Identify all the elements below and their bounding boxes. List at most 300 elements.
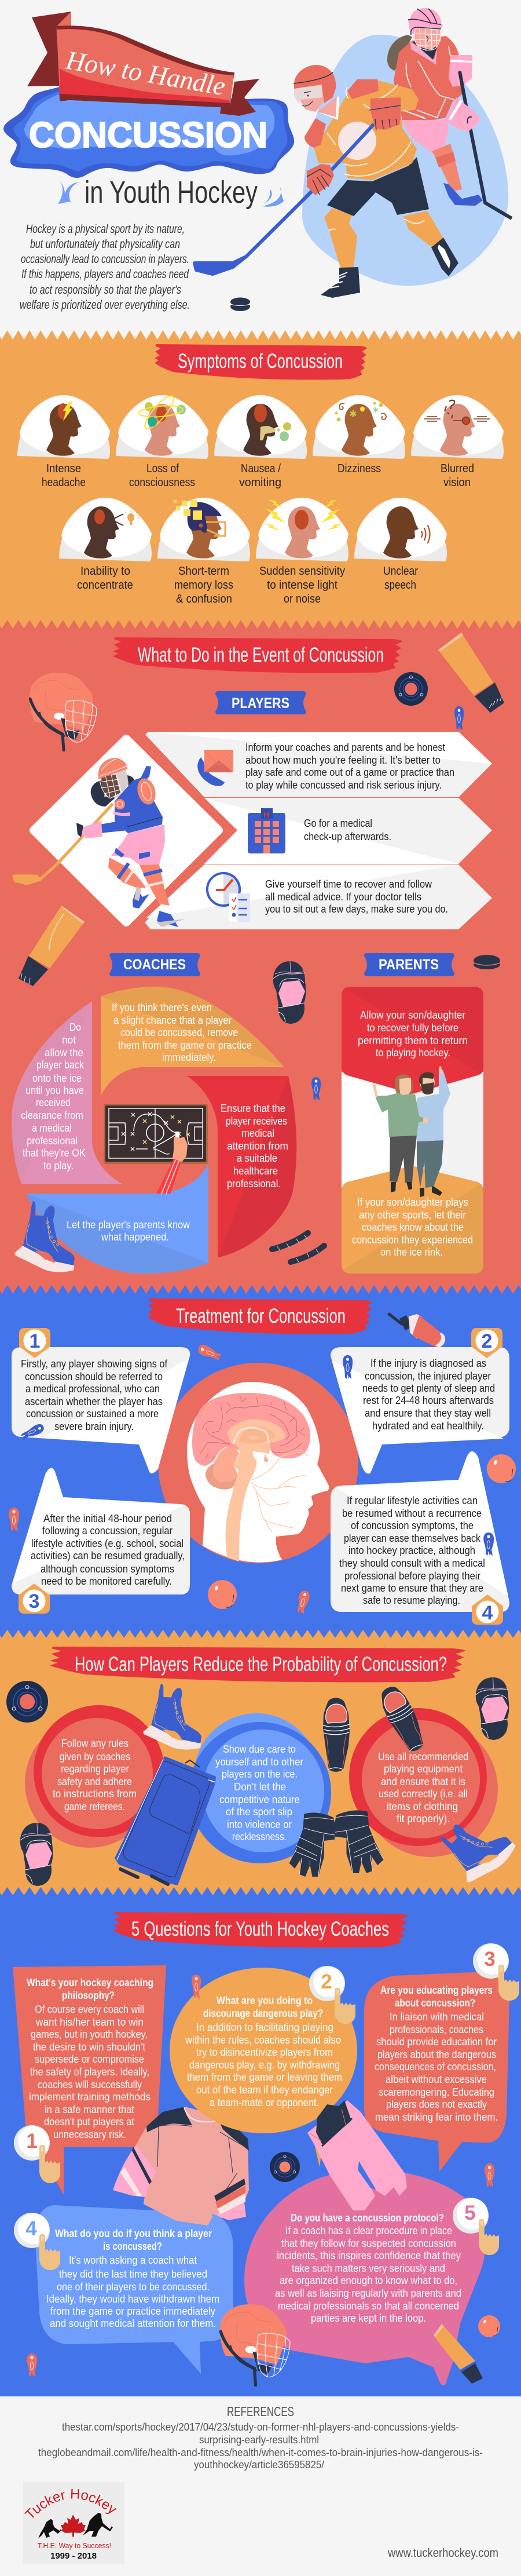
blade: clearance: allow the bbox=[45, 1046, 83, 1059]
icon: hospital bbox=[248, 808, 285, 853]
icon: phone and envelope bbox=[197, 750, 233, 786]
references: REFERENCES bbox=[227, 2404, 294, 2419]
question 3: about concussion? bbox=[395, 1997, 475, 2009]
decor: elbow pad bbox=[273, 961, 306, 1024]
question 1: philosophy? bbox=[62, 1989, 115, 2001]
question 2: What are you doing to bbox=[217, 1994, 313, 2006]
step 1: a medical professional, who can bbox=[25, 1382, 160, 1395]
label bbox=[383, 565, 418, 592]
decor: washer bbox=[394, 672, 428, 706]
step 3: need to be monitored carefully. bbox=[41, 1575, 172, 1587]
blade: remove from game: them from the game or practice bbox=[118, 1039, 252, 1051]
heading: Symptoms of Concussion bbox=[155, 344, 367, 380]
orange advice block: any other sports, let their bbox=[359, 1209, 466, 1221]
blade: medical attention: Ensure that the bbox=[221, 1102, 285, 1114]
step 3: After the initial 48-hour period bbox=[43, 1512, 172, 1524]
question 4: What do you do if you think a player bbox=[55, 2227, 212, 2239]
question 5: that they follow for suspected concussion bbox=[281, 2237, 456, 2249]
circle: equipment: fit properly). bbox=[397, 1812, 450, 1825]
advice row: medical check-up bbox=[204, 798, 492, 864]
blade: medical attention: healthcare bbox=[233, 1165, 278, 1177]
equipment: hockey bag bbox=[115, 1756, 216, 1885]
skate bbox=[14, 1201, 75, 1272]
circle: equipment: Use all recommended bbox=[378, 1750, 468, 1763]
question 4: It's worth asking a coach what bbox=[69, 2254, 197, 2266]
panel: coaches pinwheel bbox=[12, 987, 324, 1274]
symptom: blurred vision bbox=[411, 395, 504, 459]
red ribbon banner bbox=[27, 12, 259, 116]
decor: ribbons bbox=[27, 1975, 494, 2377]
circle: due care: into violence or bbox=[227, 1818, 292, 1830]
label: Intense bbox=[46, 462, 81, 475]
label: vomiting bbox=[239, 476, 281, 489]
step 3: lifestyle activities (e.g. school, social bbox=[31, 1537, 184, 1549]
equipment: gloves bbox=[289, 1811, 384, 1877]
question 3: consequences of concussion, bbox=[375, 2060, 496, 2073]
label bbox=[174, 565, 233, 605]
question 4: from the game or practice immediately bbox=[50, 2305, 216, 2317]
number 4 with pointing hand bbox=[14, 2213, 60, 2270]
blade: clearance bbox=[12, 1001, 123, 1184]
step 4: If regular lifestyle activities can bbox=[347, 1494, 478, 1506]
question 1: implement training methods bbox=[29, 2090, 151, 2103]
question 3: players about the dangerous bbox=[377, 2048, 496, 2060]
question 2: dangerous play, e.g. by withdrawing bbox=[189, 2059, 340, 2071]
symptom: unclear speech bbox=[354, 498, 447, 561]
heading tag: PLAYERS bbox=[215, 691, 306, 714]
blade: remove from game bbox=[101, 987, 284, 1097]
red advice block bbox=[342, 987, 483, 1094]
blade: tell parents: what happened. bbox=[101, 1231, 169, 1243]
question 3: mean striking fear into them. bbox=[375, 2111, 498, 2123]
heading tag: PARENTS bbox=[364, 953, 454, 976]
tactics board and hand bbox=[104, 1104, 208, 1194]
question 5 bbox=[244, 2170, 485, 2385]
circle: equipment bbox=[349, 1708, 498, 1857]
question 3: scaremongering. Educating bbox=[379, 2086, 494, 2098]
question 5: incidents, this inspires confidence that they bbox=[277, 2249, 461, 2261]
circle: due care: of the sport slip bbox=[226, 1805, 292, 1818]
nerves bbox=[251, 1450, 308, 1533]
decor: stick end bbox=[438, 633, 504, 713]
question 1: coaches will successfully bbox=[38, 2078, 142, 2090]
blade: remove from game: a slight chance that a player bbox=[113, 1014, 232, 1026]
blade: clearance: clearance from bbox=[21, 1109, 83, 1121]
question 5: parties are kept in the loop. bbox=[311, 2312, 426, 2324]
question 2 bbox=[170, 1968, 357, 2167]
label: headache bbox=[42, 476, 86, 489]
decor: ribbon bbox=[311, 1077, 321, 1100]
step 2: 2 bbox=[482, 1330, 492, 1352]
question 1: doesn't put players at bbox=[44, 2115, 134, 2128]
decor: ball bbox=[478, 2315, 500, 2337]
step 4: be resumed without a recurrence bbox=[342, 1507, 482, 1519]
front player bbox=[195, 65, 458, 298]
blade: remove from game: If you think there's even bbox=[112, 1001, 212, 1013]
symptom: intense headache bbox=[17, 395, 110, 459]
question 5: Do you have a concussion protocol? bbox=[291, 2212, 444, 2224]
label bbox=[441, 462, 474, 489]
logo: Tucker Hockey: 1999 - 2018 bbox=[50, 2551, 97, 2561]
step 4: 4 bbox=[482, 1602, 493, 1624]
blade: clearance: not bbox=[62, 1034, 76, 1046]
references: youthhockey/article36595825/ bbox=[194, 2459, 324, 2471]
question 1: the desire to win shouldn't bbox=[33, 2041, 145, 2053]
circle: follow rules: given by coaches bbox=[60, 1750, 130, 1763]
pituitary bbox=[264, 1453, 269, 1462]
label: Inability to bbox=[80, 565, 130, 578]
decor: puck bbox=[474, 955, 500, 969]
number 4 with pointing hand: 4 bbox=[25, 2217, 37, 2240]
step 4: next game to ensure that they are bbox=[341, 1582, 483, 1594]
question 2: within the rules, coaches should also bbox=[185, 2034, 341, 2046]
question 4: they did the last time they believed bbox=[59, 2268, 207, 2280]
decor: washer bbox=[6, 1681, 48, 1723]
symptom: short-term memory loss bbox=[157, 498, 250, 561]
question 1: want his/her team to win bbox=[35, 2016, 144, 2028]
text: play safe and come out of a game or practice than bbox=[245, 766, 454, 778]
question 1: supersede or compromise bbox=[35, 2053, 144, 2065]
intro text: welfare is prioritized over everything else. bbox=[20, 298, 190, 312]
circle: follow rules: safety and adhere bbox=[57, 1775, 132, 1787]
question 1: What's your hockey coaching bbox=[27, 1976, 153, 1988]
references bbox=[38, 2404, 483, 2471]
hero illustration: two hockey players bbox=[195, 8, 512, 311]
circle: due care: recklessness. bbox=[232, 1830, 287, 1842]
label: consciousness bbox=[129, 476, 195, 489]
decor: helmet bbox=[220, 2304, 290, 2385]
step 2: If the injury is diagnosed as bbox=[370, 1357, 486, 1369]
text: you to sit out a few days, make sure you do. bbox=[265, 903, 448, 915]
step 4: they should consult with a medical bbox=[339, 1557, 485, 1569]
text: Inform your coaches and parents and be honest bbox=[245, 741, 445, 753]
heading tag: COACHES bbox=[109, 953, 200, 976]
step 1 bbox=[12, 1328, 190, 1473]
step 2: needs to get plenty of sleep and bbox=[362, 1382, 495, 1394]
question 5: as well as liaising regularly with parents and bbox=[275, 2287, 461, 2299]
advice row: recover bbox=[145, 864, 492, 929]
number 3 with pointing hand: 3 bbox=[484, 1948, 496, 1971]
heading: 5 Questions for Youth Hockey Coaches: 5 Questions for Youth Hockey Coaches bbox=[131, 1918, 389, 1940]
panel: parents bbox=[342, 987, 483, 1274]
step 1: 1 bbox=[30, 1330, 40, 1352]
question 1: in a safe manner that bbox=[45, 2103, 134, 2115]
question 1 bbox=[13, 1965, 166, 2195]
step 1: Firstly, any player showing signs of bbox=[21, 1358, 168, 1370]
heading: What to Do in the Event of Concussion bbox=[113, 637, 402, 673]
circle: follow rules bbox=[25, 1705, 164, 1848]
label: or noise bbox=[284, 593, 321, 605]
equipment: elbow pads bbox=[20, 1677, 509, 1886]
step 4: professional before playing their bbox=[344, 1570, 480, 1582]
symptom: sensitivity to light and noise bbox=[256, 498, 348, 561]
text bbox=[304, 817, 391, 842]
blade: clearance: that they're OK bbox=[23, 1147, 86, 1159]
equipment: shin pads bbox=[323, 1682, 430, 1772]
orange advice block bbox=[342, 1166, 483, 1274]
label: speech bbox=[384, 579, 416, 592]
step 1: concussion or sustained a more bbox=[26, 1407, 159, 1420]
blade: clearance: player back bbox=[36, 1059, 85, 1071]
text: check-up afterwards. bbox=[304, 830, 391, 842]
number 2 with pointing hand bbox=[309, 1966, 355, 2024]
cerebellum bbox=[206, 1447, 239, 1490]
circle: due care: Show due care to bbox=[223, 1743, 296, 1755]
icon: clock and checklist bbox=[206, 872, 250, 922]
intro text: to act responsibly so that the player's bbox=[30, 283, 181, 297]
references: surprising-early-results.html bbox=[199, 2434, 319, 2446]
number 5 with pointing hand: 5 bbox=[464, 2202, 476, 2224]
step 4: of concussion symptoms, the bbox=[351, 1519, 474, 1531]
circle: follow rules: Follow any rules bbox=[61, 1737, 129, 1749]
heading: What to Do in the Event of Concussion: What to Do in the Event of Concussion bbox=[138, 644, 384, 666]
blade: clearance: professional bbox=[27, 1134, 78, 1147]
text bbox=[245, 741, 454, 791]
label bbox=[239, 462, 281, 489]
blade: clearance: a medical bbox=[32, 1122, 72, 1134]
decor: stick end lower-left bbox=[19, 906, 85, 986]
question 4: is concussed? bbox=[103, 2240, 162, 2252]
question 3: professionals, coaches bbox=[390, 2023, 483, 2035]
step 1: concussion should be referred to bbox=[25, 1370, 163, 1382]
number 2 with pointing hand: 2 bbox=[321, 1971, 332, 1993]
question 5: medical professionals so that all concerned bbox=[278, 2300, 459, 2312]
player diamond bbox=[34, 739, 219, 922]
blade: medical attention bbox=[187, 1076, 296, 1257]
symptom: inability to concentrate bbox=[59, 498, 152, 561]
figure: player with orange stick bbox=[14, 758, 185, 927]
step 4: safe to resume playing. bbox=[363, 1594, 460, 1606]
question 2: discourage dangerous play? bbox=[203, 2007, 323, 2019]
circle: equipment: and ensure that it is bbox=[381, 1775, 465, 1787]
decor: tape bottle bbox=[389, 1314, 445, 1348]
intro text: occasionally lead to concussion in players. bbox=[21, 253, 189, 266]
text: to play while concussed and risk serious injury. bbox=[245, 779, 442, 791]
heading: How to Handle: How to Handle bbox=[63, 45, 228, 101]
number 3 with pointing hand bbox=[473, 1943, 519, 2001]
blade: medical attention: attention from bbox=[227, 1140, 288, 1152]
hockey puck bbox=[230, 298, 250, 311]
label: concentrate bbox=[77, 579, 133, 592]
label: memory loss bbox=[174, 579, 233, 592]
decor: ribbon tag bbox=[454, 706, 464, 730]
panel: treatment steps bbox=[12, 1328, 509, 1625]
panel: coach questions bbox=[13, 1943, 519, 2385]
blade: clearance: received bbox=[36, 1096, 71, 1108]
blade: clearance: Do bbox=[69, 1021, 81, 1033]
heading tag: PARENTS: PARENTS bbox=[379, 957, 439, 973]
label: Loss of bbox=[146, 462, 179, 475]
orange advice block: concussion they experienced bbox=[352, 1234, 473, 1246]
red advice block: to playing hockey. bbox=[376, 1046, 450, 1059]
blade: tell parents bbox=[26, 1163, 208, 1274]
label: Blurred bbox=[441, 462, 474, 475]
maple leaf bbox=[61, 2515, 86, 2537]
orange advice block: coaches know about the bbox=[362, 1221, 464, 1233]
red advice block: permitting them to return bbox=[358, 1034, 468, 1046]
circle: follow rules: game referees. bbox=[64, 1800, 125, 1812]
equipment: skate tilted bbox=[428, 1805, 518, 1893]
heading: CONCUSSION: CONCUSSION bbox=[29, 115, 267, 155]
decor: ribbons and balls around treatment bbox=[9, 1343, 516, 1615]
hero title block bbox=[3, 12, 294, 312]
intro text: If this happens, players and coaches need bbox=[21, 268, 189, 281]
text: all medical advice. If your doctor tells bbox=[265, 891, 421, 903]
question 5: are organized enough to know what to do, bbox=[280, 2274, 457, 2286]
circle: due care: yourself and to other bbox=[215, 1756, 303, 1768]
brainstem bbox=[226, 1444, 270, 1561]
step 1: ascertain whether the player has bbox=[25, 1395, 163, 1407]
decor: stick end bbox=[434, 2324, 483, 2384]
question 1: Of course every coach will bbox=[35, 2003, 144, 2015]
step 2: rest for 24-48 hours afterwards bbox=[363, 1394, 494, 1406]
step 4: into hockey practice, although bbox=[348, 1544, 475, 1556]
question 1: unnecessary risk. bbox=[53, 2128, 126, 2140]
symptom: nausea bbox=[214, 395, 307, 459]
heading: 5 Questions for Youth Hockey Coaches bbox=[113, 1912, 408, 1947]
label: Short-term bbox=[178, 565, 229, 578]
blade: medical attention: medical bbox=[241, 1127, 274, 1139]
logo: Tucker Hockey: T.H.E. Way to Success! bbox=[38, 2541, 111, 2550]
question 3: should provide education for bbox=[376, 2035, 497, 2048]
question 3 bbox=[364, 1971, 509, 2172]
question 1: the safety of players. Ideally, bbox=[30, 2066, 149, 2078]
blade: medical attention: a suitable bbox=[237, 1152, 277, 1164]
decorative swashes bbox=[58, 181, 284, 207]
heading: Symptoms of Concussion: Symptoms of Concussion bbox=[178, 350, 343, 373]
panel: symptoms grid bbox=[17, 392, 504, 605]
logo: Tucker Hockey bbox=[23, 2482, 124, 2564]
step 4: player can ease themselves back bbox=[344, 1532, 481, 1544]
number 1 with pointing hand: 1 bbox=[26, 2130, 38, 2152]
question 4 bbox=[35, 2196, 233, 2374]
skate guards bbox=[272, 1233, 324, 1262]
illustration: head with brain bbox=[158, 1363, 358, 1563]
circle: due care: Don't let the bbox=[234, 1780, 286, 1793]
blade: clearance: until you have bbox=[25, 1084, 84, 1096]
orange advice block: on the ice rink. bbox=[380, 1246, 443, 1258]
question 2: out of the team if they endanger bbox=[196, 2084, 333, 2096]
blade: clearance: to play. bbox=[43, 1159, 74, 1172]
illustration: two parents bbox=[372, 1066, 450, 1197]
label bbox=[259, 565, 345, 605]
question 5: take such matters very seriously and bbox=[292, 2262, 445, 2274]
skater silhouettes bbox=[38, 2513, 113, 2538]
intro text bbox=[20, 222, 190, 312]
question 3: players does not exactly bbox=[386, 2098, 487, 2110]
symptom: loss of consciousness bbox=[116, 392, 208, 459]
decor: washer bbox=[270, 2152, 300, 2182]
circle: equipment: playing equipment bbox=[384, 1763, 463, 1775]
step 3: although concussion symptoms bbox=[41, 1563, 174, 1575]
circle: due care bbox=[189, 1713, 331, 1863]
label: Unclear bbox=[383, 565, 418, 578]
question 3: albeit without excessive bbox=[386, 2073, 487, 2085]
panel: reduce probability circles bbox=[25, 1705, 498, 1863]
text: Go for a medical bbox=[304, 817, 372, 829]
label: Nausea / bbox=[241, 462, 281, 475]
number 5 with pointing hand bbox=[453, 2198, 499, 2255]
panel: players advice bbox=[14, 732, 492, 929]
question 1: games, but in youth hockey, bbox=[31, 2028, 148, 2040]
brain bbox=[192, 1393, 310, 1466]
references: thestar.com/sports/hockey/2017/04/23/study-on-former-nhl-players-and-concussions-yields- bbox=[62, 2421, 459, 2433]
symptom: dizziness bbox=[313, 395, 405, 459]
step 2 bbox=[331, 1328, 509, 1474]
blade: tell parents: Let the player's parents know bbox=[67, 1218, 190, 1231]
orange advice block: If your son/daughter plays bbox=[357, 1196, 468, 1208]
text bbox=[265, 878, 448, 915]
label: Sudden sensitivity bbox=[259, 565, 345, 578]
step 2: concussion, the injured player bbox=[365, 1370, 491, 1382]
question 3: In liaison with medical bbox=[390, 2011, 484, 2023]
logo: Tucker Hockey: Tucker Hockey bbox=[24, 2489, 117, 2518]
step 3 bbox=[12, 1468, 190, 1614]
red advice block: to recover fully before bbox=[367, 1021, 458, 1034]
blade: remove from game: could be concussed, remove bbox=[120, 1026, 238, 1038]
blade: remove from game: immediately. bbox=[162, 1051, 216, 1063]
pale blue oval backdrop bbox=[302, 35, 508, 286]
step 3: activities) can be resumed gradually, bbox=[31, 1549, 185, 1561]
circle: due care: competitive nature bbox=[219, 1793, 300, 1805]
equipment: skate bbox=[143, 1684, 201, 1750]
label: to intense light bbox=[267, 579, 337, 592]
blue splash behind title bbox=[3, 87, 294, 178]
heading tag: PLAYERS: PLAYERS bbox=[232, 695, 289, 711]
heading: in Youth Hockey: in Youth Hockey bbox=[85, 175, 258, 210]
label: Dizziness bbox=[337, 462, 381, 475]
question 4: Ideally, they would have withdrawn them bbox=[46, 2293, 219, 2305]
question 2: In addition to facilitating playing bbox=[196, 2021, 333, 2033]
circle: due care: players on the ice. bbox=[222, 1768, 298, 1780]
text: about how much you're feeling it. It's better to bbox=[245, 754, 441, 766]
step 4 bbox=[331, 1451, 509, 1625]
heading tag: COACHES: COACHES bbox=[123, 957, 186, 973]
label bbox=[77, 565, 133, 592]
references: theglobeandmail.com/life/health-and-fitness/health/when-it-comes-to-brain-injuries-how-dangerous-is- bbox=[38, 2447, 483, 2458]
blade: medical attention: professional. bbox=[227, 1177, 281, 1190]
step 2: and ensure that they stay well bbox=[365, 1407, 491, 1419]
label: vision bbox=[443, 476, 471, 489]
rear player bbox=[387, 8, 512, 218]
label bbox=[129, 462, 195, 489]
intro text: but unfortunately that physicality can bbox=[30, 238, 180, 251]
heading: Treatment for Concussion bbox=[148, 1298, 372, 1334]
question 4: and sought medical attention for them. bbox=[50, 2317, 216, 2329]
step 3: following a concussion, regular bbox=[42, 1524, 173, 1537]
label bbox=[42, 462, 86, 489]
red advice block: Allow your son/daughter bbox=[360, 1009, 465, 1021]
circle: equipment: items of clothing bbox=[387, 1800, 458, 1812]
text: Give yourself time to recover and follow bbox=[265, 878, 432, 890]
circle: follow rules: to instructions from bbox=[53, 1787, 137, 1800]
label: & confusion bbox=[176, 593, 232, 605]
question 5: If a coach has a clear procedure in place bbox=[285, 2224, 452, 2236]
step 2: hydrated and eat healthily. bbox=[372, 1420, 484, 1432]
question 2: them from the game or leaving them bbox=[187, 2071, 342, 2083]
blade: clearance: onto the ice bbox=[32, 1072, 82, 1084]
question 2: a team-mate or opponent. bbox=[210, 2096, 319, 2108]
intro text: Hockey is a physical sport by its nature, bbox=[26, 222, 185, 236]
illustration: pink arm and glove bbox=[307, 2100, 407, 2210]
website: www.tuckerhockey.com bbox=[387, 2546, 498, 2560]
heading: Treatment for Concussion: Treatment for Concussion bbox=[176, 1305, 346, 1327]
step 3: 3 bbox=[29, 1590, 39, 1612]
circle: equipment: used correctly (i.e. all bbox=[379, 1787, 468, 1800]
decor: helmet bbox=[30, 673, 97, 750]
blade: medical attention: player receives bbox=[226, 1115, 287, 1127]
step 1: severe brain injury. bbox=[54, 1420, 134, 1432]
